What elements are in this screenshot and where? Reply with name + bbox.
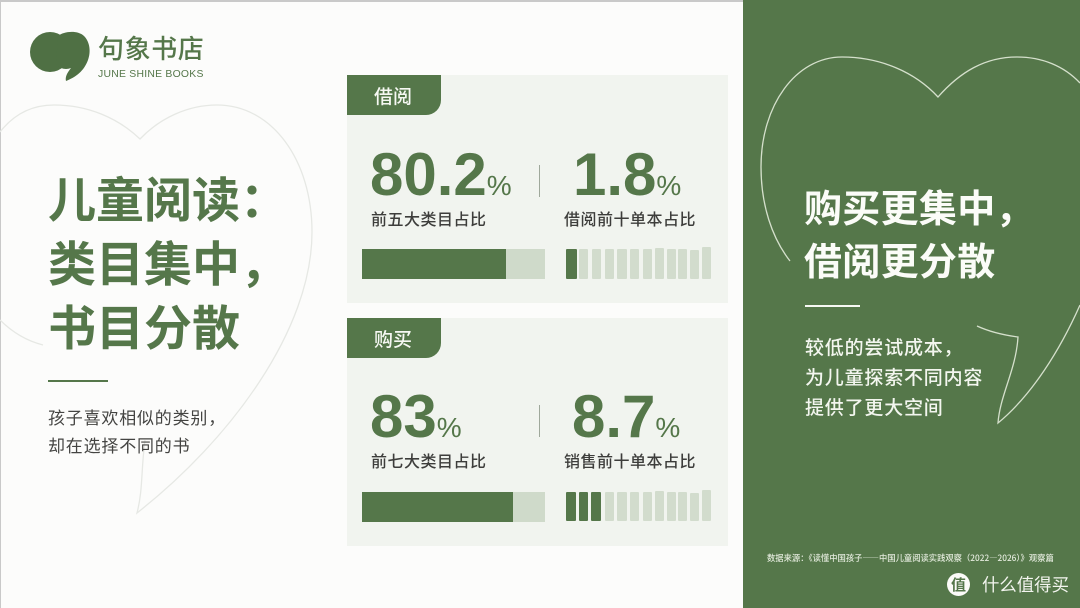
panel: borrowing <box>347 75 728 303</box>
separator <box>539 165 540 197</box>
conclusion body text: 较低的尝试成本， <box>805 333 963 360</box>
tab: purchasing <box>347 318 441 358</box>
conclusion title: 借阅更分散 <box>804 231 996 286</box>
left subtitle <box>48 404 226 457</box>
segmented bar: 1.8 percent <box>566 247 711 279</box>
decorative outline heart: right <box>760 56 1080 424</box>
left title: 类目集中， <box>48 225 288 295</box>
conclusion divider <box>805 304 860 307</box>
logo english name: JUNE SHINE BOOKS <box>98 69 204 80</box>
icon: watermark badge <box>947 573 970 596</box>
data source: 数据来源：《读懂中国孩子——中国儿童阅读实践观察（2022—2026）》观察篇 <box>767 552 1054 564</box>
left title: 书目分散 <box>48 289 240 359</box>
watermark <box>947 572 1069 597</box>
conclusion body text: 提供了更大空间 <box>805 393 944 420</box>
tab: borrowing: 借阅 <box>374 82 412 109</box>
icon: speech heart mark <box>30 32 90 81</box>
bar: 80.2 percent <box>362 249 545 279</box>
conclusion title: 购买更集中， <box>804 178 1034 233</box>
tab: purchasing: 购买 <box>374 325 412 352</box>
left subtitle: 孩子喜欢相似的类别， <box>48 404 226 429</box>
left subtitle: 却在选择不同的书 <box>48 432 190 457</box>
panel: conclusion <box>743 0 1080 608</box>
panel: purchasing <box>347 318 728 546</box>
conclusion body text: 为儿童探索不同内容 <box>805 363 983 390</box>
segmented bar: 8.7 percent <box>566 490 711 521</box>
left title <box>48 161 288 359</box>
conclusion body text <box>805 333 983 420</box>
left divider <box>48 380 108 382</box>
label: top seven categories: 前七大类目占比 <box>371 448 487 472</box>
logo <box>30 29 204 81</box>
label: top five categories: 前五大类目占比 <box>371 206 487 230</box>
stat: 8.7%: 8.7% <box>572 383 680 450</box>
logo wordmark: 句象书店 <box>98 29 204 66</box>
watermark text: 什么值得买 <box>982 572 1069 597</box>
icon: watermark badge: 值 <box>951 574 966 595</box>
tab: borrowing <box>347 75 441 115</box>
decorative outline heart: left <box>0 104 312 514</box>
bar: 83 percent <box>362 492 545 522</box>
conclusion title <box>804 178 1034 286</box>
label: top ten titles borrowed: 借阅前十单本占比 <box>564 206 696 230</box>
label: top ten titles sold: 销售前十单本占比 <box>564 448 696 472</box>
separator <box>539 405 540 437</box>
stat: 80.2%: 80.2% <box>370 141 512 208</box>
left title: 儿童阅读： <box>48 161 288 231</box>
stat: 1.8%: 1.8% <box>573 141 681 208</box>
stat: 83%: 83% <box>370 383 462 450</box>
